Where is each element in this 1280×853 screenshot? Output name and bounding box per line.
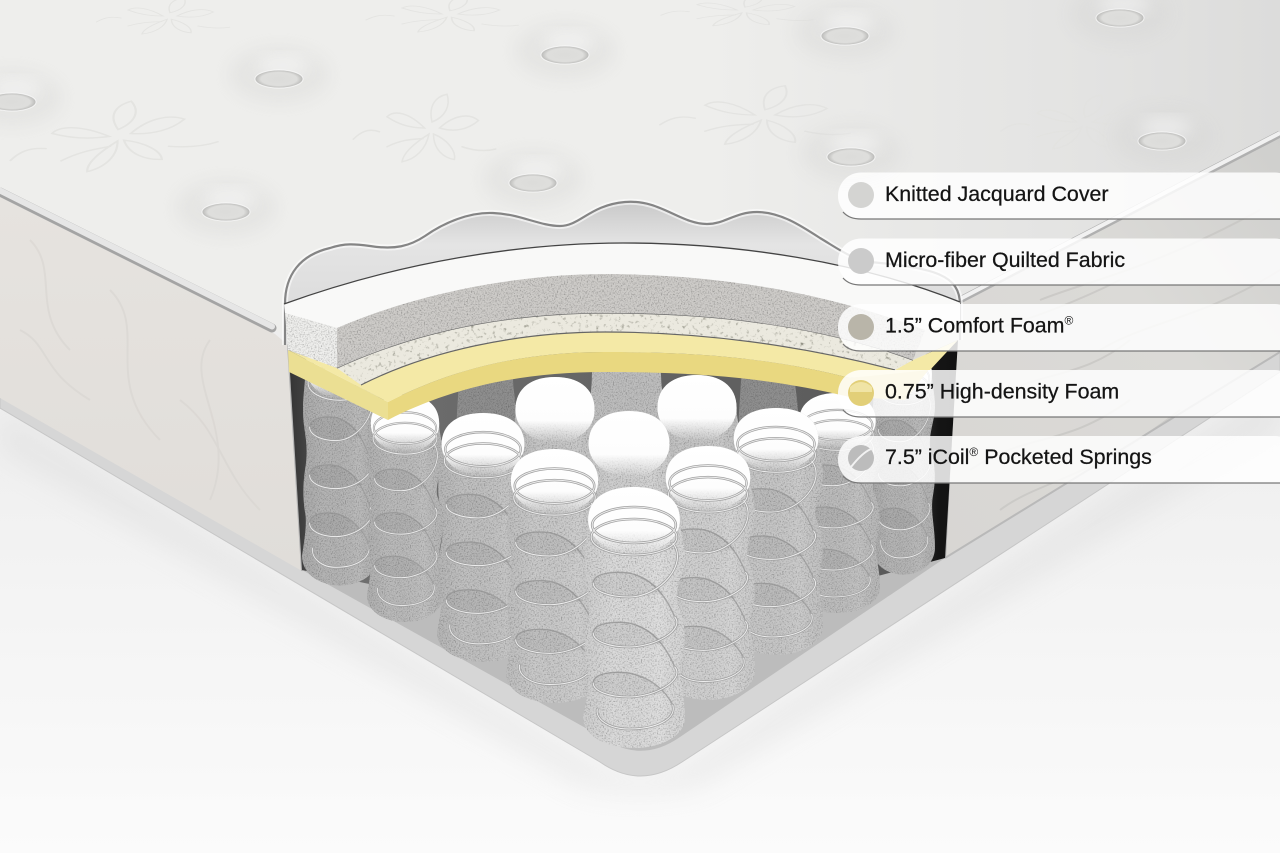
right edge piping [958,133,1280,301]
embossed floral pattern [0,0,1153,181]
quilted top surface [0,0,1280,420]
spring: back row [456,345,798,638]
label: micro-fiber quilted fabric: Micro-fiber Quilted Fabric [885,248,1125,272]
label: pocketed springs [838,436,1280,483]
label: pocketed springs: 7.5” iCoil [885,445,969,469]
base floor inside the cutout [0,394,945,751]
label: high-density foam: 0.75” High-density Foam [885,380,1119,404]
quilted fabric layer with wavy edge [285,202,960,345]
label: high-density foam [838,370,1280,417]
dark interior of the cutout [288,340,958,640]
label: pocketed springs: Pocketed Springs [978,445,1152,469]
label: comfort foam: 1.5” Comfort Foam [885,314,1064,338]
right side panel [945,135,1280,558]
label: comfort foam [838,304,1280,351]
label: knitted jacquard cover [838,172,1280,219]
pocketed springs [302,335,935,748]
base shadow [0,385,1280,792]
thick foam layer [284,243,960,368]
high-density foam (yellow) [288,332,958,420]
label: comfort foam: ® [1064,314,1074,328]
left edge piping [0,190,272,328]
spring: front [583,487,685,748]
label: micro-fiber quilted fabric [838,238,1280,285]
comfort foam layer (speckled) [337,313,913,385]
mattress base rim [0,300,1280,776]
left side panel [0,197,302,571]
label: knitted jacquard cover: Knitted Jacquard Cover [885,182,1109,206]
tufted dimples [0,0,1212,236]
label: pocketed springs: ® [969,445,978,459]
spring: side rows [302,335,935,672]
spring: middle rows [437,408,823,703]
